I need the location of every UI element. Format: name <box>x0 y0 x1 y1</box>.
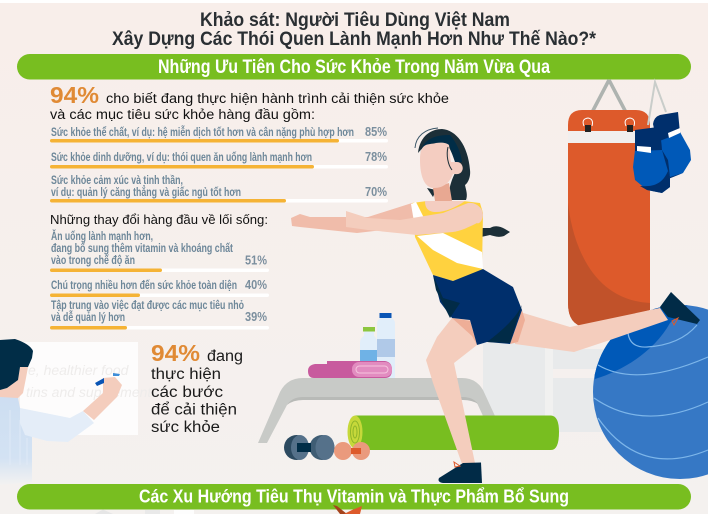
bar: nutrition 78%: Sức khỏe dinh dưỡng, ví dụ: thói quen ăn uống lành mạnh hơn <box>51 152 312 164</box>
decoration: orange leaves <box>333 505 362 514</box>
illustration: bench <box>258 378 495 443</box>
illustration: dumbbells <box>284 435 370 460</box>
illustration: water bottles <box>360 313 395 378</box>
back arm <box>291 203 415 233</box>
bar: eating 51% <box>50 230 269 272</box>
section banner: health priorities: Những Ưu Tiên Cho Sức Khỏe Trong Năm Vừa Qua <box>158 57 550 78</box>
bar: small goals 39%: Tập trung vào việc đạt được các mục tiêu nhỏ <box>51 300 244 312</box>
section banner: vitamin trends <box>17 484 691 510</box>
bar: holistic health 40%: 40% <box>245 278 267 292</box>
bar: physical health 85% <box>50 125 388 142</box>
braid <box>481 226 510 237</box>
shorts <box>433 269 522 345</box>
intro statement 94%: cho biết đang thực hiện hành trình cải thiện sức khỏe <box>106 91 449 106</box>
heading: lifestyle changes: Những thay đổi hàng đầu về lối sống: <box>50 212 268 227</box>
statement: 94% taking steps: các bước <box>151 384 223 401</box>
face <box>420 143 463 188</box>
bar: eating 51%: 51% <box>245 254 267 268</box>
statement: 94% taking steps: sức khỏe <box>151 419 220 436</box>
illustration: woman exercising <box>291 128 700 483</box>
back shoe <box>660 292 700 324</box>
front shoe <box>438 462 482 483</box>
bar: eating 51%: đang bổ sung thêm vitamin và khoáng chất <box>51 243 233 255</box>
top <box>412 201 483 281</box>
intro statement 94%: và các mục tiêu sức khỏe hàng đầu gồm: <box>50 107 315 122</box>
bar: holistic health 40%: Chú trọng nhiều hơn đến sức khỏe toàn diện <box>51 280 237 292</box>
illustration: person writing on board: tins and supplements <box>26 384 158 400</box>
bar: nutrition 78% <box>50 150 388 168</box>
bar: nutrition 78%: 78% <box>365 150 387 164</box>
illustration: person writing on board <box>0 339 158 485</box>
illustration: exercise ball <box>593 305 708 479</box>
statement: 94% taking steps: thực hiện <box>151 366 221 383</box>
bar: small goals 39%: 39% <box>245 310 267 324</box>
statement: 94% taking steps: đang <box>207 348 243 365</box>
front leg <box>426 318 477 464</box>
illustration: person writing on board: e, healthier food <box>28 362 130 378</box>
intro statement 94% <box>50 82 449 122</box>
bar: eating 51%: vào trong chế độ ăn <box>51 255 135 267</box>
illustration: folded towel <box>308 361 392 378</box>
bar: emotional health 70%: 70% <box>365 185 387 199</box>
section banner: health priorities <box>17 54 691 80</box>
bar: emotional health 70% <box>50 175 388 202</box>
title: Khảo sát: Người Tiêu Dùng Việt Nam <box>200 9 510 31</box>
hair <box>418 129 470 200</box>
bar: eating 51%: Ăn uống lành mạnh hơn, <box>51 230 153 243</box>
illustration: punching bag <box>568 80 650 327</box>
illustration: boxing gloves <box>633 82 691 193</box>
section banner: vitamin trends: Các Xu Hướng Tiêu Thụ Vitamin và Thực Phẩm Bổ Sung <box>139 486 569 506</box>
bar: physical health 85%: Sức khỏe thể chất, ví dụ: hệ miễn dịch tốt hơn và cân nặng phù hợp hơn <box>51 126 354 139</box>
neck <box>433 183 452 201</box>
statement: 94% taking steps <box>151 340 243 436</box>
bar: small goals 39%: và dễ quản lý hơn <box>51 311 125 324</box>
near arm <box>346 203 483 235</box>
back leg <box>515 308 668 352</box>
bar: emotional health 70%: Sức khỏe cảm xúc và tinh thần, <box>51 175 183 187</box>
title: Xây Dựng Các Thói Quen Lành Mạnh Hơn Như Thế Nào?* <box>112 28 596 50</box>
bar: emotional health 70%: ví dụ: quản lý căng thẳng và giấc ngủ tốt hơn <box>51 186 241 199</box>
bar: small goals 39% <box>50 300 269 330</box>
decoration: partial items below banner <box>95 510 194 514</box>
title <box>112 9 596 50</box>
illustration: yoga mat <box>348 416 559 450</box>
bar: physical health 85%: 85% <box>365 125 387 139</box>
intro statement 94%: 94% <box>50 82 99 108</box>
statement: 94% taking steps: 94% <box>151 340 200 366</box>
statement: 94% taking steps: để cải thiện <box>151 402 237 418</box>
bar: holistic health 40% <box>50 278 269 297</box>
background shelf <box>483 320 613 432</box>
